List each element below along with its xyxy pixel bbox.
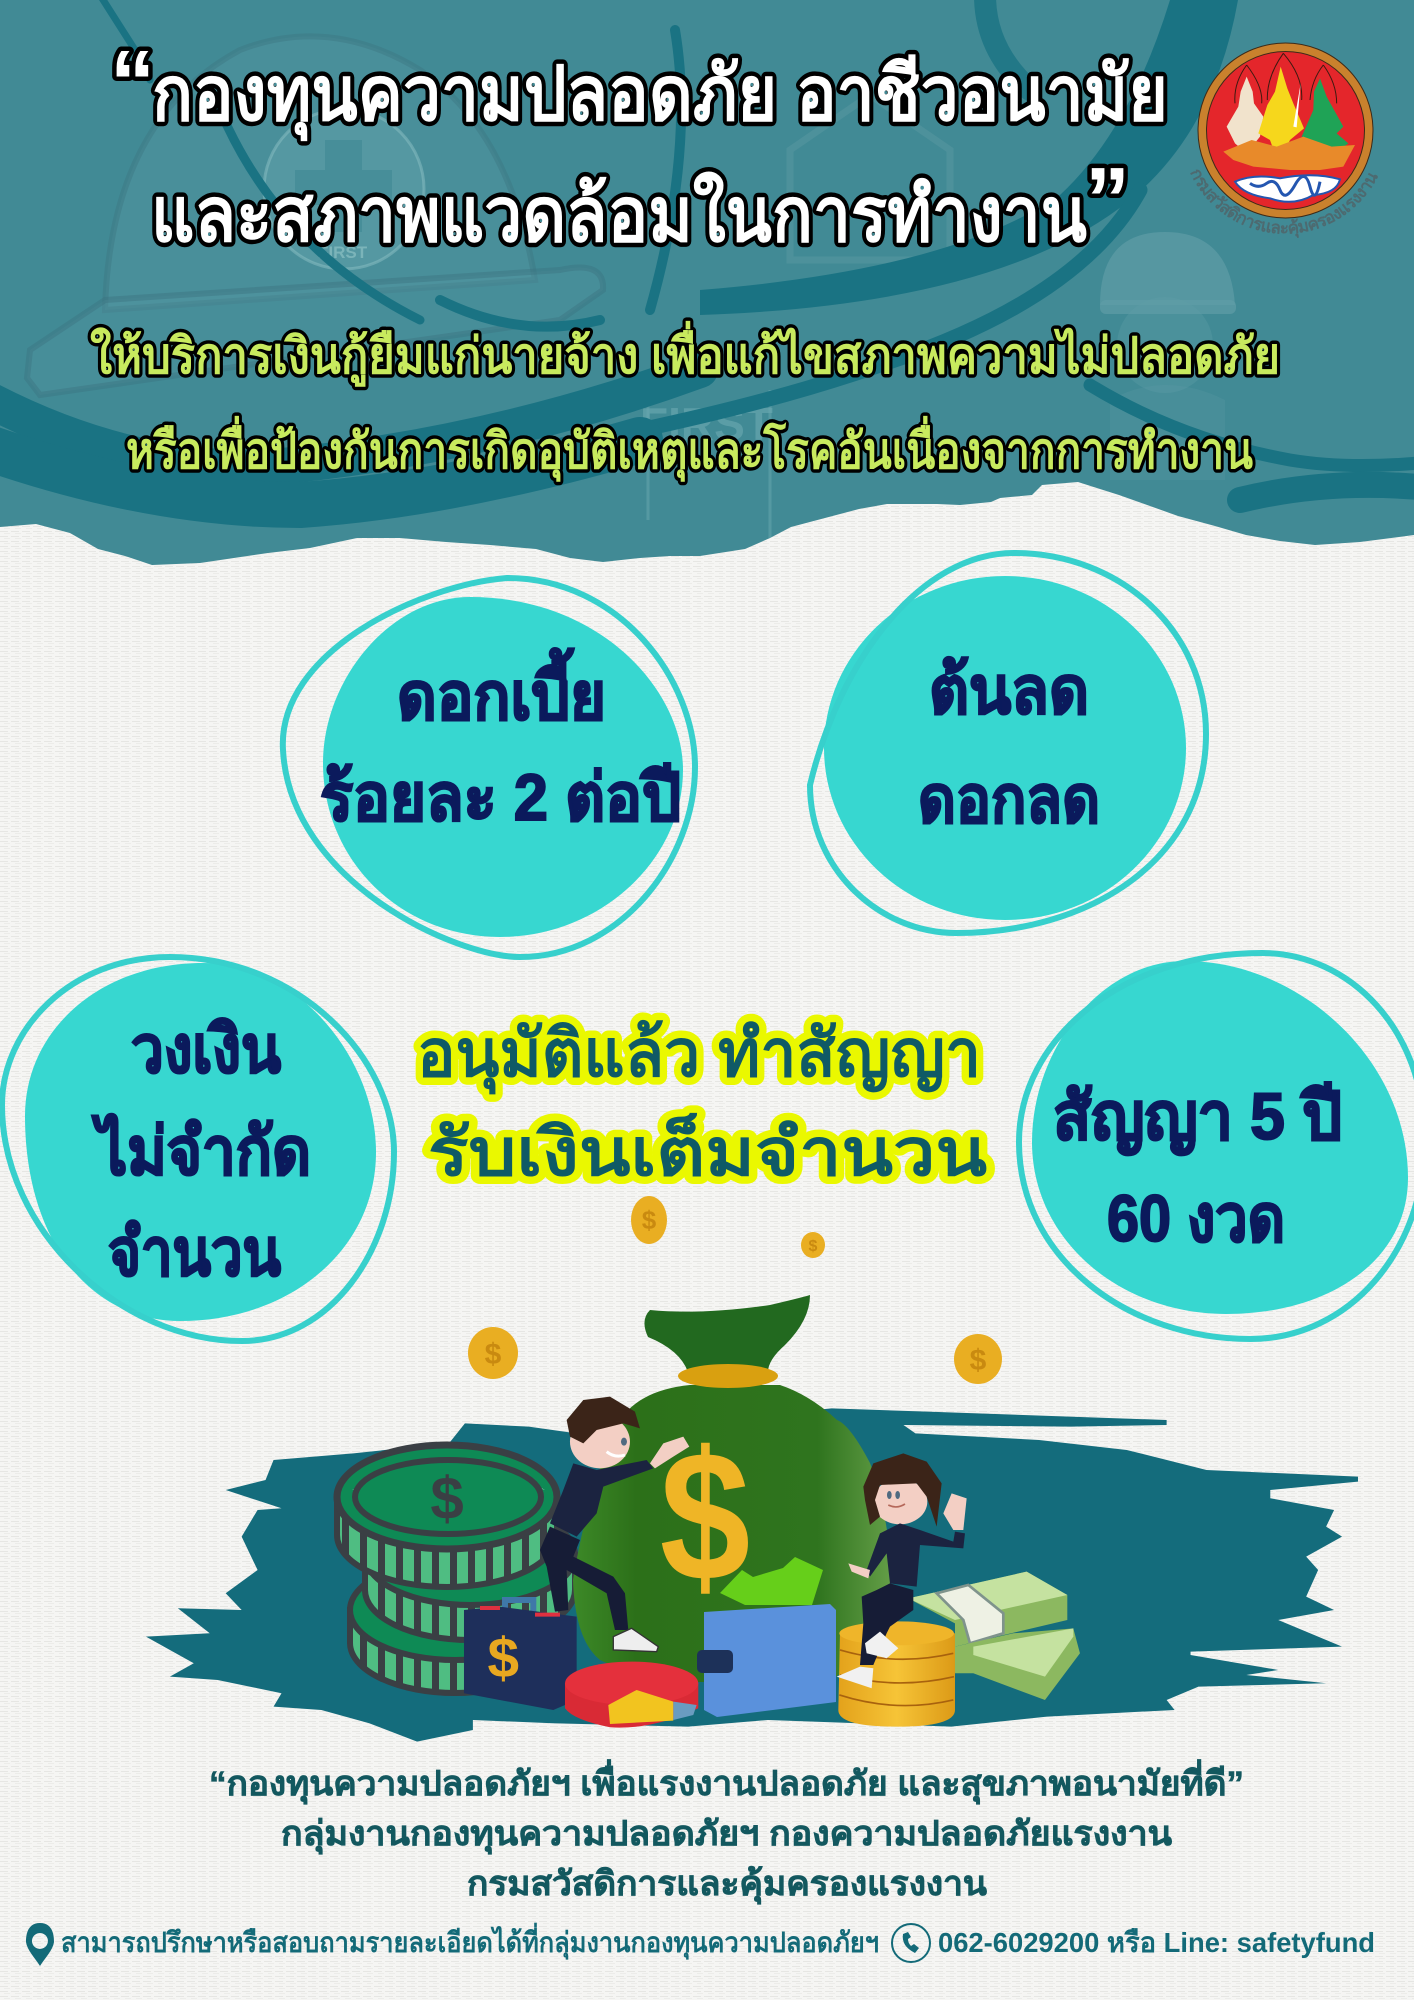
icon: location pin bbox=[26, 1923, 54, 1966]
panel: credit limit circle: จำนวน bbox=[108, 1215, 281, 1289]
panel: interest rate circle bbox=[283, 578, 695, 957]
woman figure bbox=[837, 1453, 967, 1688]
panel: reducing balance circle: ดอกลด bbox=[918, 762, 1100, 836]
brush: thin arc bbox=[640, 190, 1140, 430]
watermark: safety first sign bbox=[643, 390, 772, 538]
briefcase bbox=[464, 1600, 577, 1710]
title bbox=[110, 33, 1168, 258]
callout: approval message bbox=[417, 1016, 987, 1189]
watermark: large safety helmet bbox=[27, 36, 603, 395]
logo: centre figure bbox=[1258, 67, 1304, 163]
gold coin stack bbox=[838, 1621, 955, 1727]
banknote stacks bbox=[908, 1572, 1080, 1700]
watermark: house outline bbox=[790, 95, 950, 260]
panel: contract term circle: 60 งวด bbox=[1107, 1181, 1285, 1255]
brush: main arc bbox=[700, 0, 1238, 315]
title: “ bbox=[110, 33, 155, 133]
footer message: กรมสวัสดิการและคุ้มครองแรงงาน bbox=[467, 1865, 987, 1905]
subtitle bbox=[90, 321, 1280, 482]
logo: flame halos bbox=[1235, 53, 1337, 103]
panel: credit limit circle: วงเงิน bbox=[131, 1012, 281, 1086]
watermark: worker with helmet bbox=[1100, 232, 1236, 393]
brush: lower band bbox=[0, 440, 640, 505]
panel: reducing balance circle bbox=[810, 553, 1206, 933]
phone and line contact: 062-6029200 หรือ Line: safetyfund bbox=[938, 1927, 1375, 1958]
brush splash backdrop bbox=[146, 1408, 1358, 1742]
header band with brush strokes and watermarks bbox=[0, 0, 1414, 570]
briefcase: $ bbox=[488, 1627, 519, 1690]
callout: approval message: อนุมัติแล้ว ทำสัญญา bbox=[417, 1016, 981, 1095]
title: และสภาพแวดล้อมในการทำงาน bbox=[151, 171, 1087, 258]
callout: approval message: รับเงินเต็มจำนวน bbox=[428, 1112, 987, 1189]
title: กองทุนความปลอดภัย อาชีวอนามัย bbox=[152, 52, 1168, 142]
green coin stack bbox=[337, 1445, 575, 1693]
icon: falling coins: $ bbox=[809, 1238, 818, 1255]
panel: contract term circle: สัญญา 5 ปี bbox=[1053, 1079, 1342, 1155]
brush: lower left swath bbox=[0, 370, 700, 468]
man figure bbox=[540, 1397, 689, 1652]
pie chart bbox=[565, 1662, 698, 1728]
watermark: large safety helmet: FIRST bbox=[318, 243, 368, 262]
illustration: money bag scene bbox=[146, 1295, 1358, 1742]
panel: credit limit circle: ไม่จำกัด bbox=[92, 1113, 311, 1188]
wallet with notes bbox=[697, 1557, 836, 1717]
footer message: กลุ่มงานกองทุนความปลอดภัยฯ กองความปลอดภัยแรงงาน bbox=[281, 1815, 1172, 1855]
panel: interest rate circle: ร้อยละ 2 ต่อปี bbox=[320, 760, 681, 834]
panel: contract term circle bbox=[1019, 953, 1414, 1339]
icon: department logo: กรมสวัสดิการและคุ้มครองแรงงาน bbox=[1190, 170, 1378, 238]
subtitle: ให้บริการเงินกู้ยืมแก่นายจ้าง เพื่อแก้ไขสภาพความไม่ปลอดภัย bbox=[90, 321, 1280, 387]
logo: cloud bbox=[1235, 175, 1340, 202]
brush: top splashes bbox=[100, 0, 1030, 327]
icon: falling coins: $ bbox=[642, 1205, 657, 1235]
panel: credit limit circle bbox=[2, 957, 394, 1341]
footer message: “กองทุนความปลอดภัยฯ เพื่อแรงงานปลอดภัย และสุขภาพอนามัยที่ดี” bbox=[209, 1759, 1244, 1805]
icon: falling coins: $ bbox=[970, 1344, 987, 1377]
brush: lower right arc bbox=[1090, 385, 1414, 466]
icon: department logo bbox=[1190, 42, 1378, 238]
green coin stack: $ bbox=[430, 1465, 464, 1532]
watermark: safety first sign: FIRST bbox=[640, 398, 773, 450]
logo: left figure bbox=[1227, 77, 1263, 153]
logo: right figure bbox=[1302, 78, 1348, 160]
contact text: สามารถปรึกษาหรือสอบถามรายละเอียดได้ที่กลุ่มงานกองทุนความปลอดภัยฯ bbox=[61, 1922, 879, 1960]
logo: lotus base bbox=[1223, 137, 1355, 170]
icon: falling coins: $ bbox=[485, 1338, 502, 1371]
title: ” bbox=[1085, 150, 1130, 250]
money bag: $ bbox=[660, 1412, 750, 1619]
brush: lower right band bbox=[1240, 485, 1414, 500]
icon: falling coins bbox=[468, 1196, 1002, 1384]
icon: phone bbox=[892, 1924, 930, 1962]
panel: reducing balance circle: ต้นลด bbox=[929, 653, 1089, 727]
panel: interest rate circle: ดอกเบี้ย bbox=[397, 647, 606, 733]
money bag bbox=[573, 1295, 892, 1682]
logo: sword bbox=[1293, 83, 1301, 127]
footer message bbox=[209, 1759, 1244, 1905]
